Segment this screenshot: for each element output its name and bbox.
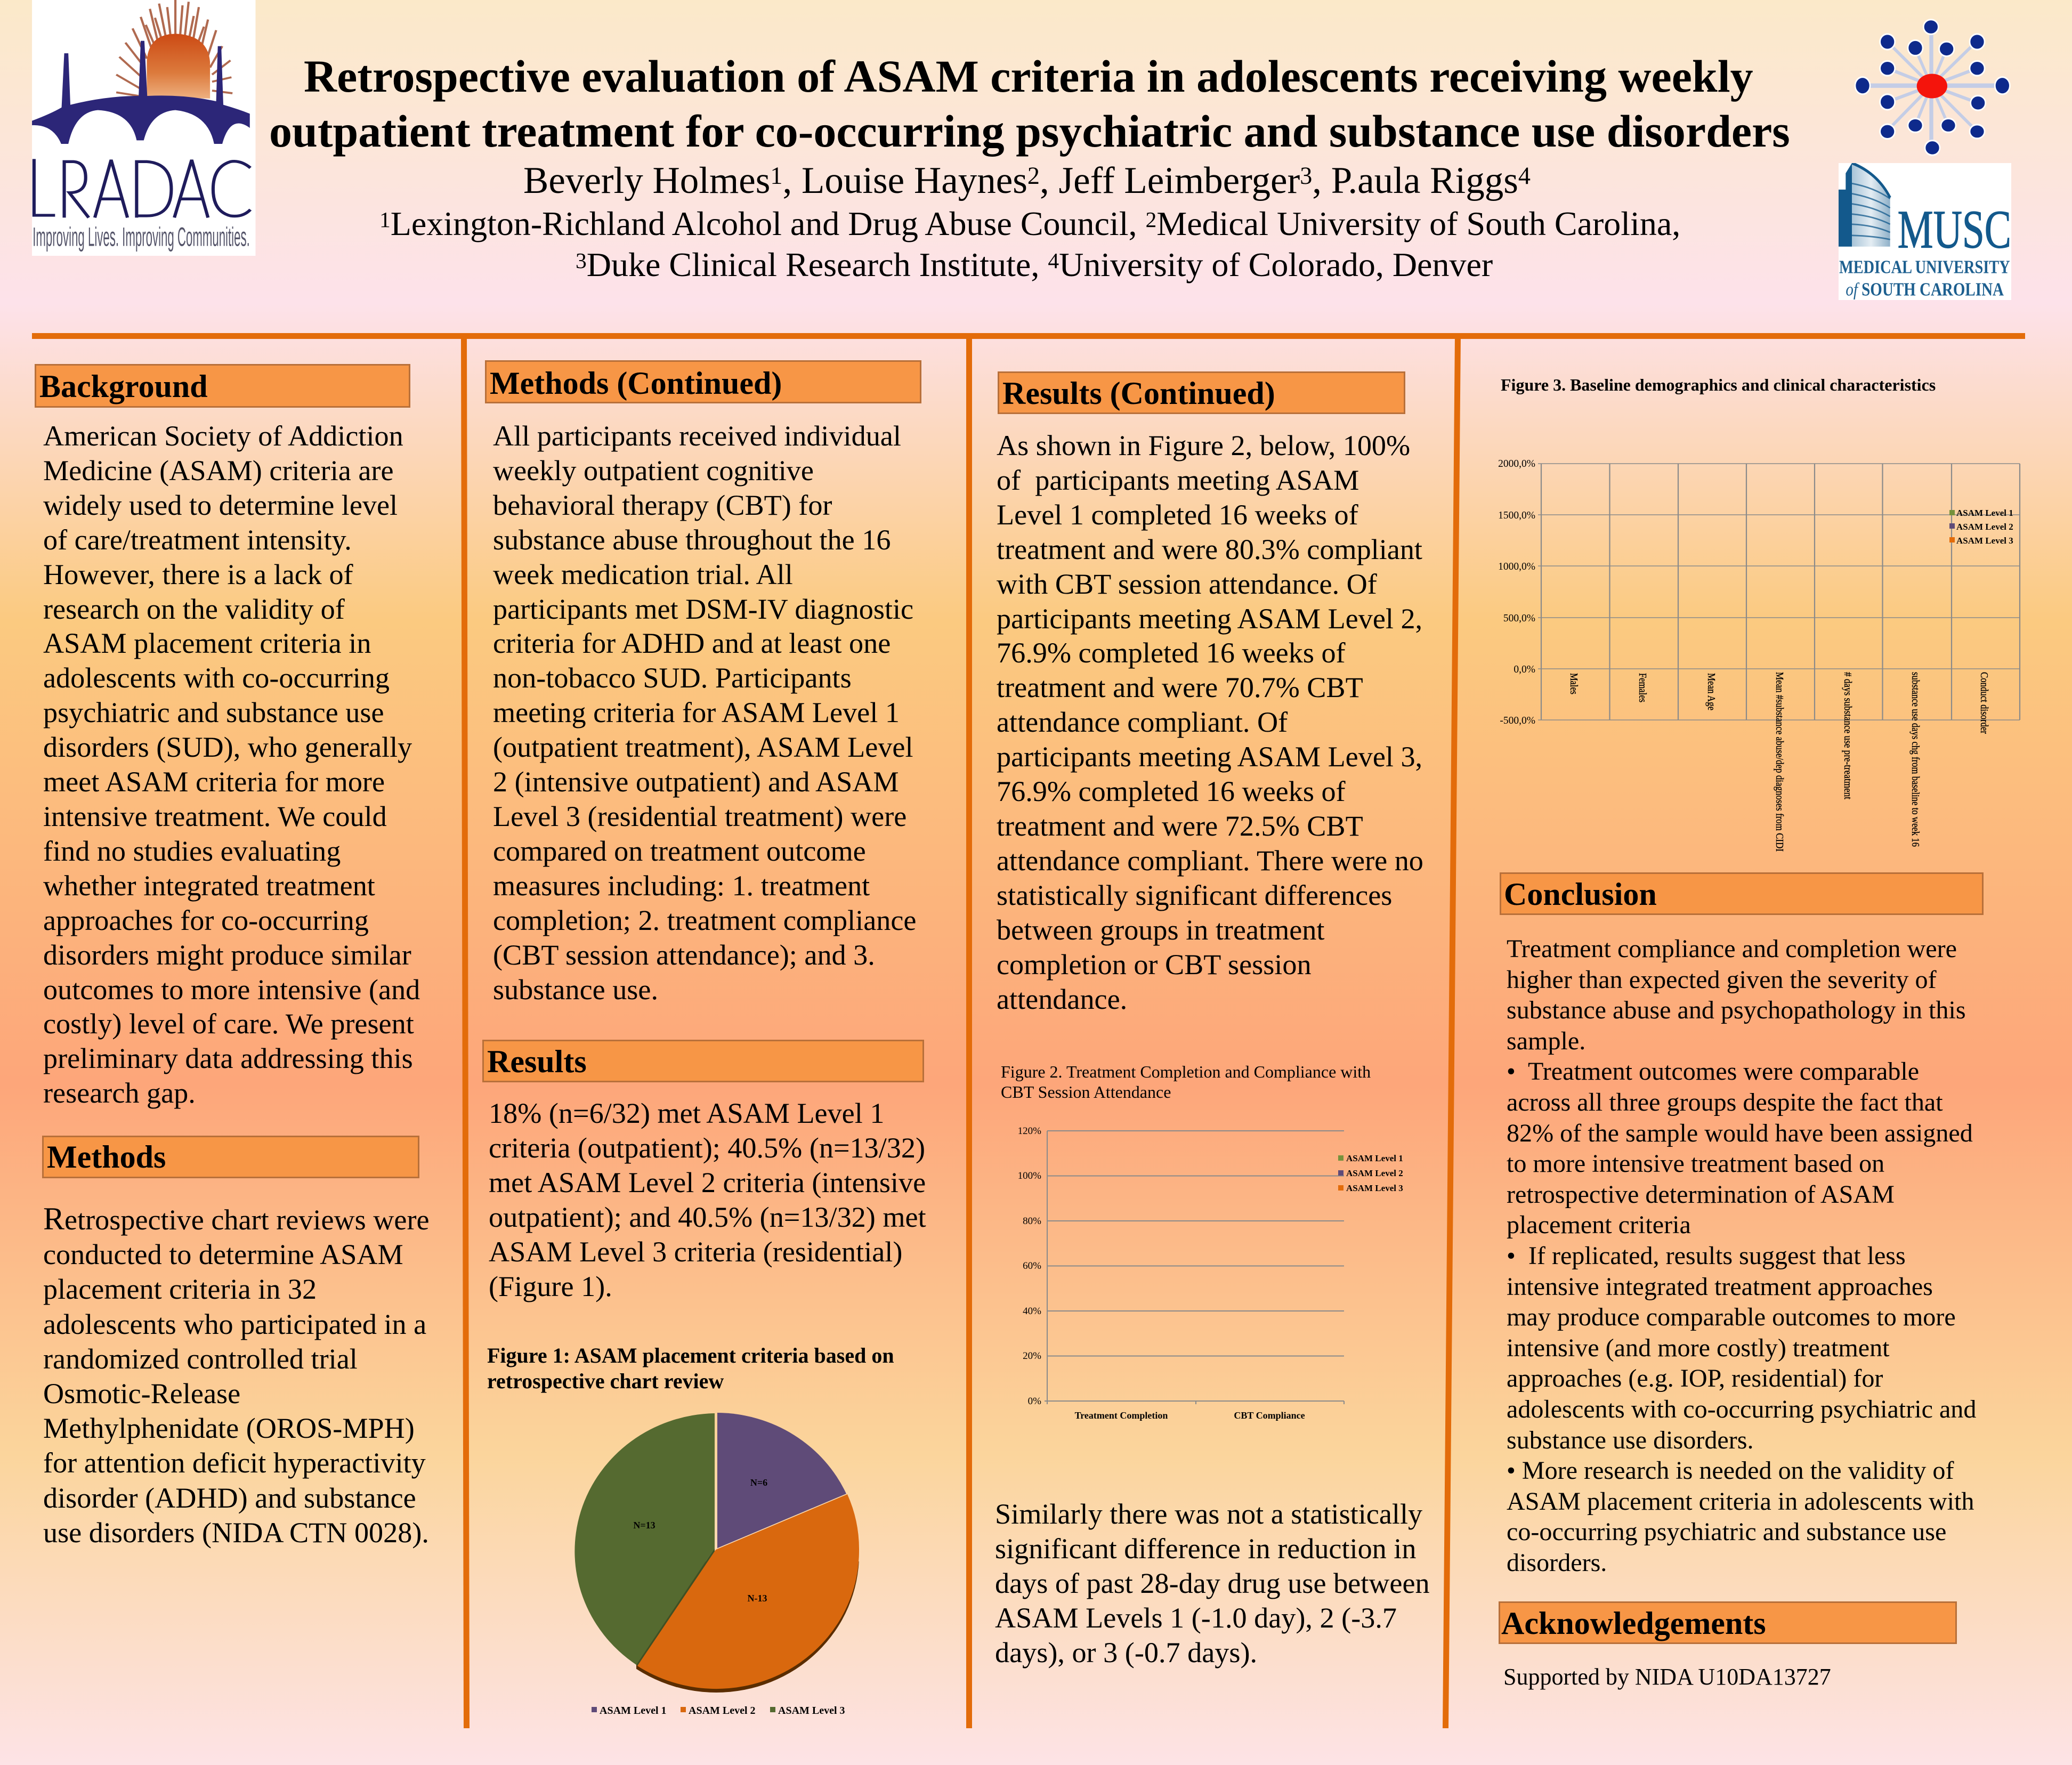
heading: Methods (Continued): Methods (Continued) [490,366,782,401]
chart: pie figure 1: N=13 [633,1520,655,1531]
chart: figure 3 axes: Females [1637,673,1648,702]
chart: figure 3 axes: ASAM Level 3 [1956,536,2013,546]
text: methods continued: All participants received individual weekly outpatient cognitive behavioral therapy (CBT) for substance abuse throughout the 16 week medication trial. All participants met DSM-IV diagnostic criteria for ADHD and at least one non-tobacco SUD. Participants meeting criteria for ASAM Level 1 (outpatient treatment), ASAM Level 2 (intensive outpatient) and ASAM Level 3 (residential treatment) were compared on treatment outcome measures including: 1. treatment completion; 2. treatment compliance (CBT session attendance); and 3. substance use. [493,420,916,1005]
heading: Results (Continued) [998,371,1405,414]
chart: figure 3 axes: Males [1568,673,1580,694]
chart: figure 3 axes: 0,0% [1513,664,1535,675]
heading: Conclusion [1500,872,1984,915]
chart: figure 3 axes: 2000,0% [1498,458,1535,469]
chart: figure 3 axes: substance use days chg from baseline to week 16 [1909,672,1921,847]
chart: figure 2 axes: CBT Compliance [1234,1410,1305,1421]
chart: figure 3 axes: ASAM Level 2 [1956,522,2013,532]
chart: figure 3 axes: Mean #substance abuse/dep diagnoses from CIDI [1774,672,1785,852]
heading: Background: Background [39,369,208,404]
text: acknowledgements: Supported by NIDA U10DA13727 [1503,1664,1831,1690]
chart: figure 3 axes: 1000,0% [1498,561,1535,572]
top horizontal rule [32,333,2025,339]
text: similarly: Similarly there was not a statistically significant difference in reduction in days of past 28-day drug use between ASAM Levels 1 (-1.0 day), 2 (-3.7 days), or 3 (-0.7 days). [995,1498,1430,1669]
chart: figure 3 axes: -500,0% [1500,715,1535,726]
chart: figure 3 axes: 500,0% [1503,613,1535,624]
heading: Results [482,1040,924,1082]
chart: figure 2 axes: 60% [1023,1260,1041,1272]
heading: Acknowledgements: Acknowledgements [1501,1606,1766,1641]
chart: figure 2 axes: ASAM Level 2 [1346,1168,1403,1178]
heading: Background [35,364,410,408]
heading: Methods [42,1136,419,1178]
heading: Conclusion: Conclusion [1504,877,1657,912]
heading: Acknowledgements [1499,1601,1957,1644]
chart: pie figure 1: ASAM Level 3 [778,1705,845,1717]
logo: MUSC [1839,163,2011,300]
chart: figure 2 axes: Treatment Completion [1075,1410,1168,1421]
affiliations: 1Lexington-Richland Alcohol and Drug Abuse Council, 2Medical University of South Carolina, 3Duke Clinical Research Institute, 4University of Colorado, Denver [379,205,1680,284]
chart: figure 2 axes: 0% [1028,1396,1041,1407]
heading: Methods (Continued) [485,360,921,403]
figure 2 caption: Figure 2. Treatment Completion and Compliance with CBT Session Attendance [1001,1062,1371,1102]
heading: Results (Continued): Results (Continued) [1002,376,1275,411]
chart: figure 3 axes: # days substance use pre-treatment [1842,672,1854,799]
chart: pie figure 1: N=6 [750,1477,767,1488]
authors: Beverly Holmes1, Louise Haynes2, Jeff Leimberger3, P.aula Riggs4 [523,160,1531,201]
text: background: American Society of Addiction Medicine (ASAM) criteria are widely used to determine level of care/treatment intensity. However, there is a lack of research on the validity of ASAM placement criteria in adolescents with co-occurring psychiatric and substance use disorders (SUD), who generally meet ASAM criteria for more intensive treatment. We could find no studies evaluating whether integrated treatment approaches for co-occurring disorders might produce similar outcomes to more intensive (and costly) level of care. We present preliminary data addressing this research gap. [43,420,420,1109]
chart: figure 3 axes: ASAM Level 1 [1956,508,2013,518]
chart: figure 2 axes: ASAM Level 3 [1346,1183,1403,1193]
chart: pie figure 1: ASAM Level 1 [600,1705,667,1717]
chart: pie figure 1: ASAM Level 2 [689,1705,756,1717]
chart: figure 3 axes: Conduct disorder [1978,672,1990,734]
chart: figure 3 axes: 1500,0% [1498,510,1535,521]
chart: figure 2 axes: 120% [1018,1126,1041,1137]
text: methods: Retrospective chart reviews were conducted to determine ASAM placement criteria in 32 adolescents who participated in a randomized controlled trial Osmotic-Release Methylphenidate (OROS-MPH) for attention deficit hyperactivity disorder (ADHD) and substance use disorders (NIDA CTN 0028). [43,1201,430,1549]
title: Retrospective evaluation of ASAM criteria in adolescents receiving weekly outpatient treatment for co-occurring psychiatric and substance use disorders [269,51,1790,157]
logo: MUSC: of SOUTH CAROLINA [1846,280,2004,300]
logo: LRADAC [32,0,256,256]
chart: pie figure 1: N-13 [747,1593,767,1604]
text: results continued: As shown in Figure 2, below, 100% of participants meeting ASAM Level 1 completed 16 weeks of treatment and were 80.3% compliant with CBT session attendance. Of participants meeting ASAM Level 2, 76.9% completed 16 weeks of treatment and were 70.7% CBT attendance compliant. Of participants meeting ASAM Level 3, 76.9% completed 16 weeks of treatment and were 72.5% CBT attendance compliant. There were no statistically significant differences between groups in treatment completion or CBT session attendance. [997,430,1423,1015]
chart: figure 2 axes: 100% [1018,1170,1041,1181]
text: results: 18% (n=6/32) met ASAM Level 1 criteria (outpatient); 40.5% (n=13/32) met ASAM Level 2 criteria (intensive outpatient); and 40.5% (n=13/32) met ASAM Level 3 criteria (residential) (Figure 1). [489,1097,926,1302]
chart: figure 3 axes [1498,458,2021,852]
heading: Methods: Methods [47,1139,166,1175]
chart: figure 3 axes: Mean Age [1705,673,1717,710]
heading: Results: Results [487,1044,587,1079]
chart: pie figure 1 [574,1413,859,1717]
text: conclusion: Treatment compliance and completion were higher than expected given the severity of substance abuse and psychopathology in this sample. • Treatment outcomes were comparable across all three groups despite the fact that 82% of the sample would have been assigned to more intensive treatment based on retrospective determination of ASAM placement criteria • If replicated, results suggest that less intensive integrated treatment approaches may produce comparable outcomes to more intensive (and more costly) treatment approaches (e.g. IOP, residential) for adolescents with co-occurring psychiatric and substance use disorders. • More research is needed on the validity of ASAM placement criteria in adolescents with co-occurring psychiatric and substance use disorders. [1507,935,1976,1577]
figure 3 title: Figure 3. Baseline demographics and clinical characteristics [1501,375,1936,394]
chart: figure 2 axes: 80% [1023,1216,1041,1227]
chart: figure 2 axes [1018,1126,1403,1421]
chart: figure 2 axes: 20% [1023,1350,1041,1362]
chart: figure 2 axes: ASAM Level 1 [1346,1153,1403,1163]
figure 1 caption: Figure 1: ASAM placement criteria based on retrospective chart review [487,1343,894,1393]
logo: network star [1855,19,2011,156]
chart: figure 2 axes: 40% [1023,1306,1041,1317]
